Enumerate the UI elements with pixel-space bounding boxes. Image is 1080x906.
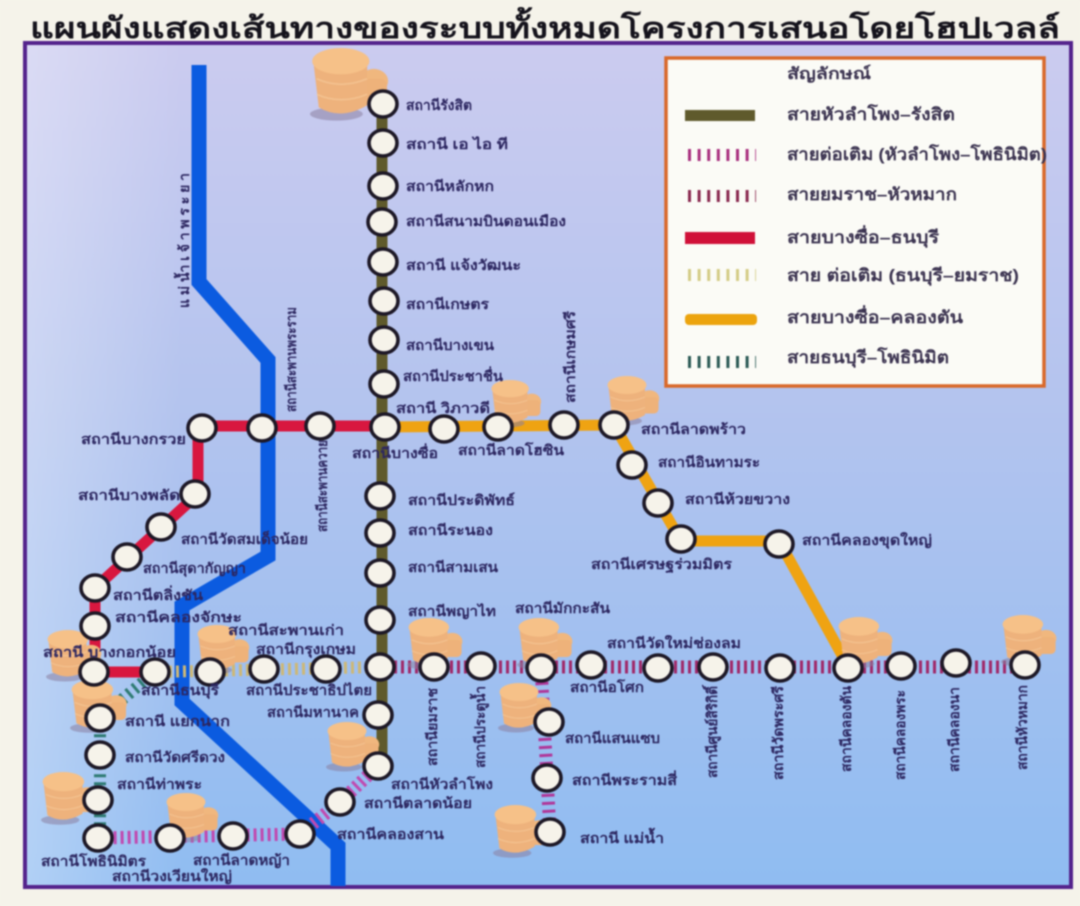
station labels: สถานีวงเวียนใหญ่	[112, 867, 232, 885]
legend item: Bang Sue - Khlong Tan: สายบางซื่อ–คลองตัน	[787, 305, 963, 327]
icon: Rama 4 interchange	[498, 683, 551, 732]
line: Hua Lamphong extension to Pho Nimit (dotted pink)	[98, 766, 378, 838]
station labels: สถานี เอ ไอ ที	[406, 135, 508, 152]
station labels: สถานีประชาชื่น	[403, 366, 503, 384]
vertical station labels: สถานีคลองพระ	[892, 690, 908, 780]
station labels: สถานี แยกนาก	[125, 713, 230, 729]
station labels: สถานี บางกอกน้อย	[43, 644, 176, 660]
icon: Hua Lamphong	[326, 722, 379, 772]
station labels: สถานีแสนแซบ	[565, 730, 660, 746]
station labels: สถานี วิภาวดี	[396, 400, 490, 416]
station labels: สถานีธนบุรี	[141, 682, 220, 699]
station labels: สถานีคลองจักษะ	[115, 609, 242, 625]
station labels: สถานีสะพานเก่า	[228, 622, 344, 638]
station labels: สถานีอโศก	[570, 678, 644, 695]
legend item: Extension Thonburi - Yommarat: สาย ต่อเติม (ธนบุรี–ยมราช)	[787, 265, 1019, 286]
station labels: สถานีพระรามสี่	[572, 770, 678, 788]
legend item: Yommarat - Hua Mak: สายยมราช–หัวหมาก	[787, 185, 957, 204]
line: Bang Sue to Khlong Tan (orange)	[385, 425, 848, 666]
icon: Khlong Tan	[837, 617, 892, 668]
station labels: สถานีประชาธิปไตย	[246, 681, 372, 698]
station labels: สถานีโพธินิมิตร	[41, 852, 147, 869]
icon: Hua Mak	[1001, 615, 1056, 666]
vertical station labels: สถานีเกษมศรี	[562, 310, 578, 403]
station labels: สถานีมักกะสัน	[515, 600, 610, 616]
legend item: Extension Hua Lamphong - Pho Nimit: สายต่อเติม (หัวลำโพง–โพธินิมิต)	[787, 144, 1047, 164]
station labels: สถานีเศรษฐร่วมมิตร	[591, 556, 733, 574]
line: Thonburi to Pho Nimit (dotted green)	[100, 672, 155, 838]
icon: Saphan Khwai area	[490, 380, 541, 428]
station labels: สถานีกรุงเกษม	[256, 641, 356, 658]
station labels: สถานีตลิ่งชัน	[113, 585, 203, 603]
vertical station labels: สถานีศูนย์สิริกิติ์	[701, 684, 721, 778]
station labels: สถานีบางกรวย	[81, 431, 186, 447]
vertical station labels: สถานีสะพานพระราม	[283, 307, 299, 412]
line: Hua Lamphong to Rangsit (olive)	[376, 104, 388, 766]
station labels: สถานี แจ้งวัฒนะ	[406, 257, 521, 273]
station labels: สถานี แม่น้ำ	[580, 827, 664, 846]
station labels: สถานีพญาไท	[408, 602, 496, 620]
line: Bang Sue to Thonburi (red)	[95, 426, 385, 672]
icon: Lat Ya	[165, 793, 218, 842]
vertical station labels: สถานียมราช	[424, 688, 440, 766]
station labels: สถานีเกษตร	[406, 296, 490, 312]
vertical station labels: สถานีประตูน้ำ	[469, 686, 489, 768]
legend item: Bang Sue - Thonburi	[685, 225, 940, 248]
icon: Charan	[70, 680, 127, 733]
legend heading: สัญลักษณ์	[787, 64, 871, 84]
stations: circular markers	[80, 91, 1039, 851]
icon: Bangkok Noi	[46, 630, 101, 681]
station labels: สถานีสุดากัญญา	[143, 560, 246, 577]
icon: Yommarat	[407, 618, 462, 669]
legend item: Bang Sue - Khlong Tan	[685, 305, 963, 327]
line: branch to the river (dotted pink)	[541, 666, 550, 832]
station labels: สถานีบางซื่อ	[352, 443, 438, 461]
station labels: สถานีวัดศรีดวง	[125, 749, 225, 765]
vertical station labels: สถานีหัวหมาก	[1014, 685, 1030, 770]
icon: Lat Phrao	[606, 376, 659, 426]
legend frame	[666, 58, 1044, 386]
icon: Thonburi	[196, 625, 249, 674]
station labels: สถานีคลองสาน	[337, 826, 444, 842]
legend item: Thonburi - Pho Nimit: สายธนบุรี–โพธินิมิต	[787, 347, 949, 368]
icon: Tha Phra	[41, 772, 98, 825]
station labels: สถานีประดิพัทธ์	[408, 492, 515, 508]
vertical station labels: สถานีสะพานควาย	[314, 440, 330, 532]
station labels: สถานีลาดพร้าว	[641, 421, 746, 437]
station labels: สถานีอินทามระ	[658, 454, 760, 470]
station labels: สถานีระนอง	[408, 522, 493, 538]
vertical station labels: สถานีวัดพระศรี	[770, 686, 786, 780]
legend item: Hua Lamphong - Rangsit	[685, 104, 955, 124]
station labels: สถานีรังสิต	[406, 97, 472, 113]
station labels: สถานีวัดสมเด็จน้อย	[181, 530, 308, 547]
vertical station labels: สถานีคลองตัน	[838, 686, 854, 772]
icon: Rangsit	[310, 48, 388, 121]
vertical station labels	[173, 173, 1030, 780]
station labels: สถานีลาดหญ้า	[193, 852, 290, 869]
station labels: สถานีหัวลำโพง	[391, 775, 493, 792]
station labels: สถานีสามเสน	[408, 559, 498, 575]
title: แผนผังแสดงเส้นทางของระบบทั้งหมดโครงการเสนอโดยโฮปเวลล์	[30, 6, 1060, 45]
vertical station labels: สถานีคลองนา	[946, 687, 962, 772]
station labels: สถานีตลาดน้อย	[364, 795, 472, 811]
station labels: สถานีวัดใหม่ช่องลม	[607, 634, 741, 651]
station labels: สถานีท่าพระ	[117, 776, 202, 792]
station labels: สถานีลาดโฮซิน	[458, 441, 564, 458]
icon: Maenam	[493, 805, 550, 858]
legend item: Bang Sue - Thonburi: สายบางซื่อ–ธนบุรี	[787, 225, 940, 248]
station labels	[41, 97, 932, 885]
line: Yommarat to Hua Mak (dotted maroon)	[380, 660, 1025, 674]
legend item: Hua Lamphong - Rangsit: สายหัวลำโพง–รังสิต	[787, 104, 955, 124]
station labels: สถานีมหานาค	[267, 704, 359, 720]
line: extension Thonburi to Yommarat (dotted yellow)	[155, 667, 380, 672]
station labels: สถานีบางพลัด	[78, 487, 180, 503]
legend panel	[666, 58, 1047, 386]
vertical station labels: แม่น้ำเจ้าพระยา	[173, 173, 192, 308]
station labels: สถานีห้วยขวาง	[685, 491, 790, 507]
line: river (blue)	[182, 65, 338, 886]
icon: Makkasan	[517, 618, 572, 669]
station labels: สถานีบางเขน	[406, 337, 494, 353]
station labels: สถานีหลักหก	[406, 178, 494, 194]
station labels: สถานีสนามบินดอนเมือง	[406, 213, 566, 229]
station labels: สถานีคลองขุดใหญ่	[802, 531, 932, 549]
